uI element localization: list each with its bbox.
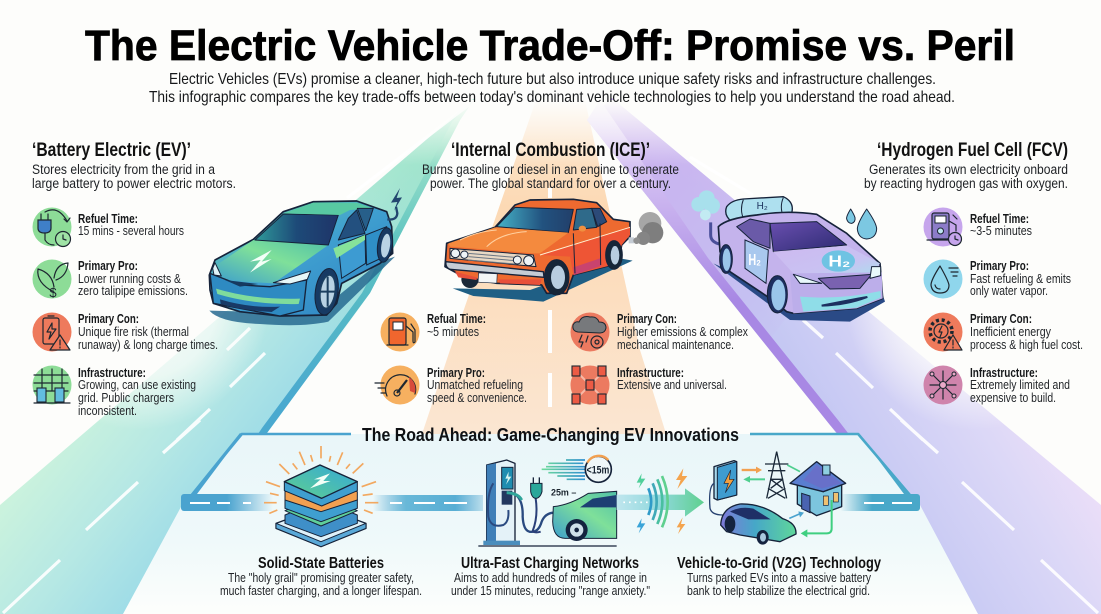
text: primary con: mechanical maintenance. [617,338,734,352]
description: hydrogen fuel cell: by reacting hydrogen gas with oxygen. [864,176,1068,191]
text: primary con: Higher emissions & complex [617,325,749,339]
icon: grid and chargers [32,366,72,404]
icon: gear warning [924,312,962,352]
subtitle: This infographic compares the key trade-offs between today's dominant vehicle technologies to help you understand the road ahead. [149,89,955,106]
text: primary con: Unique fire risk (thermal [78,325,189,339]
title: The Electric Vehicle Trade-Off: Promise vs. Peril [85,22,1015,70]
text: infrastructure: Extremely limited and [970,378,1070,392]
text: refuel time [78,212,184,238]
hydrogen car illustration: H₂ [828,253,851,270]
hydrogen car illustration: H₂ [748,252,761,269]
text: refuel time [427,312,486,339]
icon: water drop [924,260,962,298]
text: primary con: Primary Con: [970,312,1032,326]
text: primary pro [78,259,188,298]
text: primary pro: Primary Pro: [78,259,138,273]
text: refuel time: 15 mins - several hours [78,224,184,238]
text: primary pro [970,259,1071,298]
description: hydrogen fuel cell: Generates its own electricity onboard [869,162,1068,177]
text: refuel time: Refual Time: [427,312,486,326]
text: primary con [617,312,749,352]
description: hydrogen fuel cell [864,162,1068,191]
description: battery electric: Stores electricity from the grid in a [32,162,215,177]
icon: battery fire warning [32,312,72,352]
heading: internal combustion: ‘Internal Combustion (ICE)’ [451,140,650,161]
panel: internal combustion [375,140,749,405]
icon: emissions cloud and gear [570,312,610,352]
text: ultra-fast charging networks [451,555,650,598]
description: internal combustion: power. The global standard for over a century. [430,176,671,191]
text: solid-state batteries: Solid-State Batteries [258,555,384,572]
text: vehicle-to-grid technology: Vehicle-to-Grid (V2G) Technology [677,555,881,572]
text: refuel time: ~3-5 minutes [970,224,1032,238]
text: refuel time: Refuel Time: [970,212,1029,226]
text: refuel time: Refuel Time: [78,212,138,226]
text: infrastructure: inconsistent. [78,404,137,418]
text: ultra-fast charging networks: under 15 minutes, reducing "range anxiety." [451,584,650,598]
icon: fast charging station and car: 25m – [551,487,576,497]
icon: network nodes [924,366,962,404]
road fade near horizon [380,100,720,165]
text: primary pro: zero talipipe emissions. [78,284,188,298]
icon: fast charging station and car: <15m [587,465,609,477]
text: solid-state batteries: The "holy grail" promising greater safety, [228,571,414,585]
text: infrastructure: grid. Public chargers [78,391,174,405]
icon: solid-state battery stack [264,446,378,547]
panel: battery electric [32,140,236,418]
text: primary pro: Primary Pro: [970,259,1029,273]
text: primary con [78,312,218,352]
text: primary con: Primary Con: [78,312,139,326]
text: solid-state batteries [220,555,422,598]
icon: speedometer [375,366,420,404]
heading: battery electric: ‘Battery Electric (EV)’ [32,140,191,161]
text: primary pro: speed & convenience. [427,391,527,405]
description: battery electric: large battery to power electric motors. [32,176,236,191]
text: vehicle-to-grid technology: bank to help stabilize the electrical grid. [687,584,870,598]
icon: vehicle-to-grid system [710,452,846,545]
subtitle: Electric Vehicles (EVs) promise a cleaner, high-tech future but also introduce unique safety risks and infrastructure challenges. [169,71,936,88]
icon: plug and clock [32,208,72,246]
icon: leaf and dollar [32,260,72,300]
text: primary pro: Lower running costs & [78,272,182,286]
road: internal combustion [420,100,668,440]
text: infrastructure [78,366,196,418]
text: primary pro: Primary Pro: [427,366,485,380]
icon: pump network [570,366,610,404]
text: solid-state batteries: much faster charging, and a longer lifespan. [220,584,422,598]
panel: hydrogen fuel cell [864,140,1083,405]
description: internal combustion [422,162,679,191]
text: primary pro [427,366,527,405]
text: primary con: runaway) & long charge times. [78,338,218,352]
road: battery electric [0,98,475,614]
heading: the road ahead: The Road Ahead: Game-Changing EV Innovations [362,425,739,445]
text: primary pro: Unmatched refueling [427,378,523,392]
text: infrastructure: Infrastructure: [970,366,1038,380]
icon: fast charging station and car [478,456,617,546]
text: primary con: Primary Con: [617,312,677,326]
text: vehicle-to-grid technology: Turns parked EVs into a massive battery [687,571,872,585]
text: primary pro: Fast refueling & emits [970,272,1071,286]
arrow: energy flow to grid [617,468,704,534]
electric car illustration [209,188,402,325]
text: primary pro: only water vapor. [970,284,1048,298]
text: refuel time: ~5 minutes [427,325,479,339]
panel: the road ahead [123,425,978,614]
icon: leaf and dollar: $ [49,285,57,300]
road: hydrogen [587,98,1101,614]
text: infrastructure: Infrastructure: [617,366,684,380]
text: vehicle-to-grid technology [677,555,881,598]
description: battery electric [32,162,236,191]
text: infrastructure: Extensive and universal. [617,378,727,392]
text: infrastructure: expensive to build. [970,391,1056,405]
subtitle [149,71,955,106]
text: infrastructure: Growing, can use existing [78,378,196,392]
hydrogen car illustration: H₂ [757,201,768,212]
text: infrastructure [970,366,1070,405]
text: primary con: Inefficient energy [970,325,1052,339]
hydrogen car illustration [691,190,885,322]
text: refuel time [970,212,1032,238]
description: internal combustion: Burns gasoline or diesel in an engine to generate [422,162,679,177]
icon: hydrogen pump [924,208,962,246]
icon: fuel pump [380,312,420,352]
text: infrastructure [617,366,727,392]
text: ultra-fast charging networks: Ultra-Fast Charging Networks [461,555,639,572]
gasoline car illustration [445,199,663,302]
text: infrastructure: Infrastructure: [78,366,146,380]
text: primary con [970,312,1083,352]
text: ultra-fast charging networks: Aims to add hundreds of miles of range in [454,571,647,585]
